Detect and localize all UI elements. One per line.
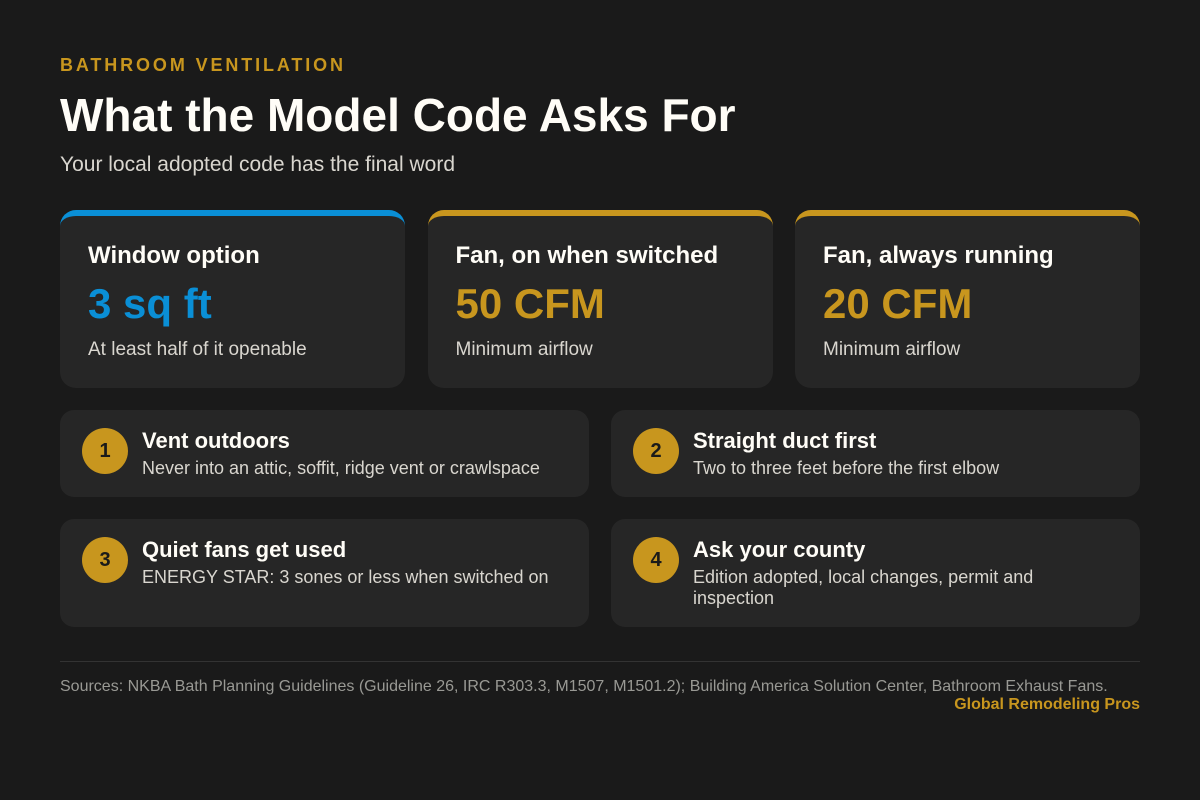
- subtitle: Your local adopted code has the final word: [60, 153, 455, 176]
- title: What the Model Code Asks For: [60, 89, 736, 141]
- panel: window option: Window option: [88, 242, 260, 269]
- panel: step 4: Edition adopted, local changes, permit and inspection: [693, 567, 1033, 608]
- panel: window option: At least half of it openable: [88, 339, 307, 360]
- panel: step 3: [60, 519, 589, 627]
- panel: step 3: ENERGY STAR: 3 sones or less when switched on: [142, 567, 549, 587]
- sources: Sources: NKBA Bath Planning Guidelines (Guideline 26, IRC R303.3, M1507, M1501.2); Building America Solution Center, Bathroom Exhaust Fans.: [60, 678, 1108, 695]
- panel: fan on when switched: Minimum airflow: [456, 339, 593, 360]
- panel: step 2: 2: [650, 440, 662, 462]
- panel: step 3: Quiet fans get used: [142, 537, 346, 562]
- panel: fan always running: [795, 210, 1140, 388]
- panel: fan always running: Minimum airflow: [823, 339, 960, 360]
- panel: fan on when switched: Fan, on when switched: [456, 242, 718, 269]
- panel: fan always running: Fan, always running: [823, 242, 1054, 269]
- panel: window option: 3 sq ft: [88, 280, 212, 327]
- brand credit: Global Remodeling Pros: [954, 696, 1140, 713]
- panel: step 1: 1: [99, 440, 111, 462]
- panel: step 2: [611, 410, 1140, 497]
- panel: step 1: Never into an attic, soffit, ridge vent or crawlspace: [142, 458, 540, 478]
- panel: step 4: 4: [650, 549, 662, 571]
- panel: step 2: Straight duct first: [693, 428, 876, 453]
- panel: step 3: 3: [99, 549, 111, 571]
- panel: step 2: Two to three feet before the first elbow: [693, 458, 999, 478]
- panel: step 4: Ask your county: [693, 537, 865, 562]
- panel: step 4: [611, 519, 1140, 627]
- panel: step 1: [60, 410, 589, 497]
- panel: fan always running: 20 CFM: [823, 280, 972, 327]
- panel: fan on when switched: 50 CFM: [456, 280, 605, 327]
- panel: fan on when switched: [428, 210, 773, 388]
- eyebrow: BATHROOM VENTILATION: [60, 55, 346, 75]
- panel: window option: [60, 210, 405, 388]
- panel: step 1: Vent outdoors: [142, 428, 290, 453]
